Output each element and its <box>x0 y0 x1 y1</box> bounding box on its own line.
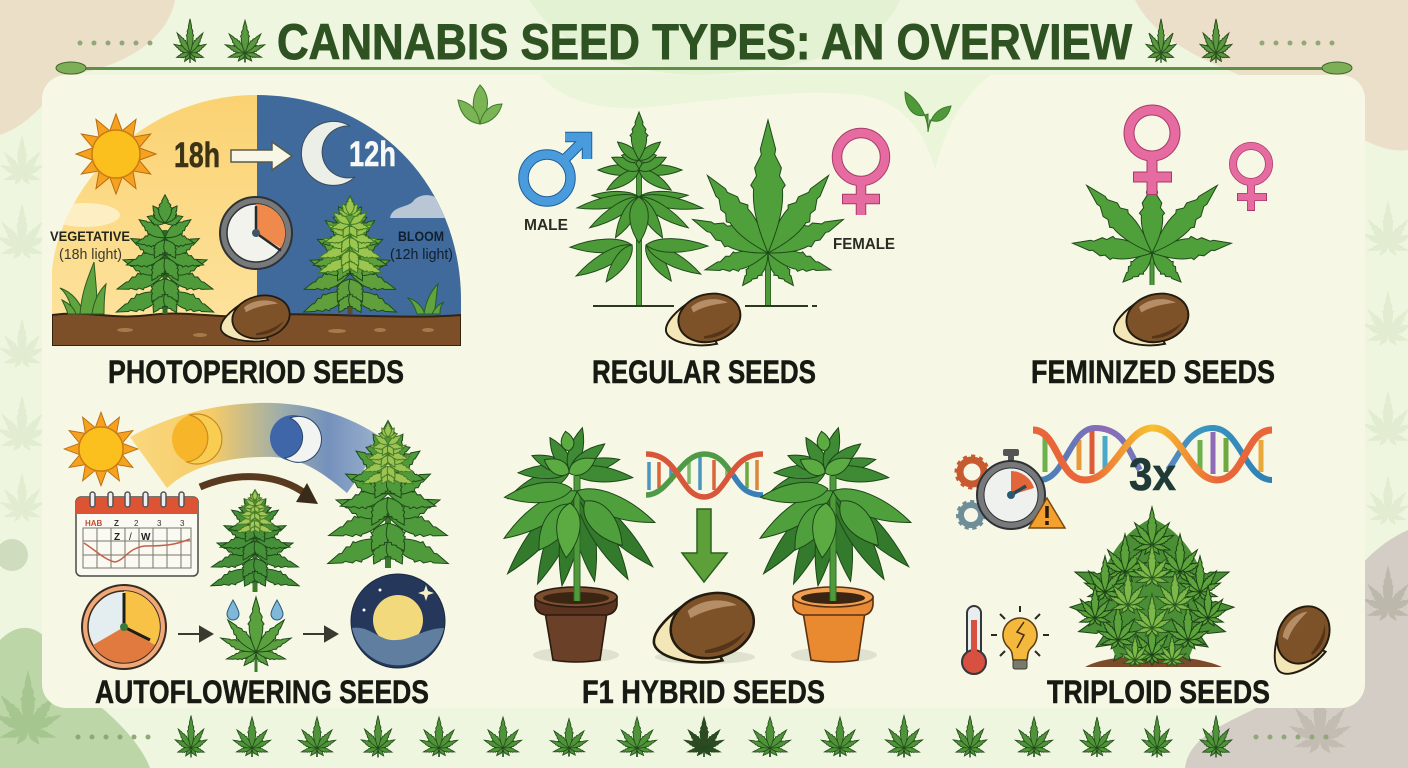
label: vegetative <box>50 228 130 263</box>
female leaf <box>688 120 848 306</box>
bottom leaf row <box>76 715 1328 757</box>
icon: cracked bulb <box>991 606 1049 669</box>
ground line <box>593 305 817 307</box>
day-night arc <box>130 403 385 493</box>
arrow <box>231 142 292 170</box>
label: female: FEMALE <box>833 236 895 253</box>
large female symbol <box>1129 110 1175 195</box>
heading: REGULAR SEEDS <box>592 354 816 390</box>
icon: sun <box>76 114 156 194</box>
arrow <box>178 627 212 641</box>
icon: calendar: Z <box>114 519 119 528</box>
icon: calendar: W <box>141 532 151 543</box>
icon: clock <box>82 585 166 669</box>
water drops <box>227 600 283 620</box>
icon: calendar: 3 <box>157 519 162 528</box>
label: bloom: (12h light) <box>390 246 453 263</box>
seed <box>1251 589 1350 685</box>
female leaf <box>1071 175 1233 288</box>
seed <box>666 287 746 349</box>
small plant <box>208 490 302 593</box>
male plant <box>570 112 708 306</box>
shadows <box>533 647 877 664</box>
panel: autoflowering seeds <box>64 403 452 710</box>
heading: F1 HYBRID SEEDS <box>582 674 825 710</box>
large plant <box>324 421 452 574</box>
icon: clock <box>220 197 292 269</box>
leaf <box>219 597 293 672</box>
orange pot <box>793 587 873 662</box>
heading: AUTOFLOWERING SEEDS <box>95 674 429 710</box>
main panel <box>42 75 1365 708</box>
duration 18h: 18h <box>174 136 220 175</box>
panel: regular seeds <box>524 112 895 390</box>
bloom plant <box>300 196 400 320</box>
bush <box>1070 507 1234 670</box>
icon: female symbol <box>837 133 885 215</box>
seed <box>1114 287 1194 349</box>
panel: feminized seeds <box>1031 110 1275 390</box>
dna helix <box>1033 428 1272 480</box>
icon: calendar: HAB <box>85 519 103 528</box>
label: vegetative: (18h light) <box>59 246 122 263</box>
title: CANNABIS SEED TYPES: AN OVERVIEW <box>277 14 1133 70</box>
brown pot <box>535 587 617 662</box>
dna helix small <box>646 454 763 497</box>
icon: warning <box>1029 498 1065 528</box>
grass <box>60 262 444 314</box>
title ornaments <box>56 19 1352 74</box>
icon: moon <box>301 121 355 185</box>
icon: half moon night <box>270 415 321 462</box>
icon: sun <box>64 412 138 486</box>
floating panel leaves <box>458 85 951 132</box>
green arrow <box>682 509 727 582</box>
seed <box>221 290 294 344</box>
icon: calendar: 2 <box>134 519 139 528</box>
icon: thermometer <box>962 606 986 674</box>
brown arrow <box>200 477 318 504</box>
icon: half moon day <box>172 414 222 464</box>
icon: stopwatch <box>977 449 1045 529</box>
icon: night moon <box>351 574 445 668</box>
label: male: MALE <box>524 217 568 234</box>
label: 3x: 3x <box>1129 449 1176 500</box>
icon: calendar: 3 <box>180 519 185 528</box>
icon: calendar: / <box>129 532 132 543</box>
icon: calendar: Z <box>114 532 120 543</box>
duration 12h: 12h <box>349 135 396 174</box>
vegetative plant <box>113 195 217 320</box>
icon: male symbol <box>524 137 587 202</box>
label: bloom: BLOOM <box>398 228 444 244</box>
label: vegetative: VEGETATIVE <box>50 228 130 244</box>
right plant <box>754 426 916 601</box>
heading: FEMINIZED SEEDS <box>1031 354 1275 390</box>
left plant <box>498 426 660 601</box>
heading: PHOTOPERIOD SEEDS <box>108 354 404 390</box>
panel: photoperiod seeds <box>40 90 472 390</box>
icon: gears <box>956 456 988 528</box>
seed <box>654 584 761 667</box>
icon: calendar <box>76 492 198 576</box>
day and night dome <box>40 90 472 350</box>
panel: triploid seeds <box>956 428 1350 710</box>
small female symbol <box>1233 146 1269 211</box>
heading: TRIPLOID SEEDS <box>1047 674 1270 710</box>
panel: f1 hybrid seeds <box>498 426 916 710</box>
label: bloom <box>390 228 453 263</box>
arrow <box>303 627 337 641</box>
panel tint blob <box>540 75 990 170</box>
